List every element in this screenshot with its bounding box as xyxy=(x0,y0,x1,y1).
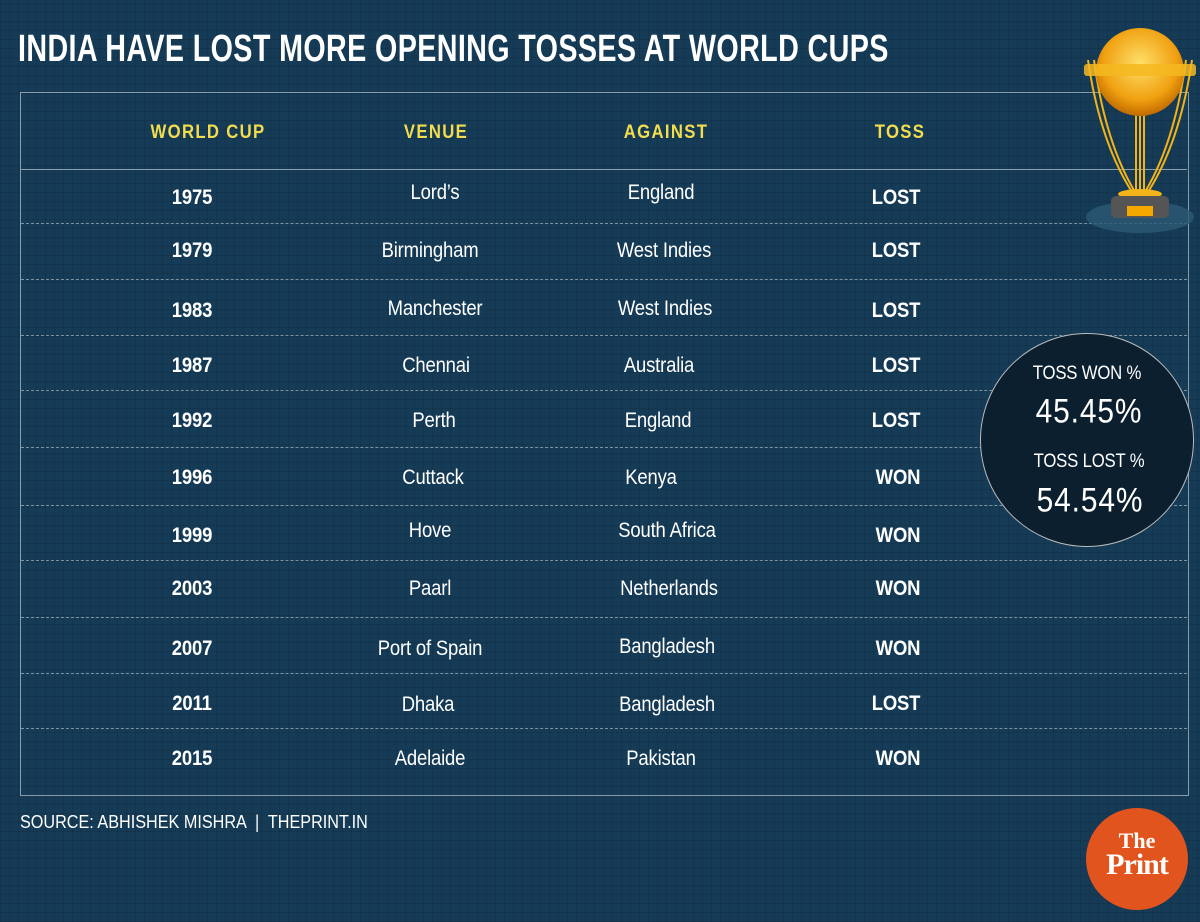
text: Adelaide xyxy=(395,747,465,770)
icon: trophy xyxy=(1084,28,1196,233)
text: 2003 xyxy=(172,577,212,600)
table header xyxy=(150,122,925,143)
text: Port of Spain xyxy=(378,637,482,660)
text: 1983 xyxy=(172,299,212,322)
text: 1992 xyxy=(172,409,212,432)
logo: ThePrint xyxy=(1086,808,1188,910)
text: VENUE xyxy=(404,122,468,143)
text: 1987 xyxy=(172,354,212,377)
text: Dhaka xyxy=(402,693,454,716)
text: LOST xyxy=(872,354,920,377)
text: AGAINST xyxy=(624,122,708,143)
stats circle: 45.45% xyxy=(1036,392,1142,430)
source: SOURCE: ABHISHEK MISHRA | THEPRINT.IN xyxy=(20,812,368,832)
text: WORLD CUP xyxy=(151,122,265,143)
stats circle xyxy=(980,333,1194,547)
text: England xyxy=(625,409,691,432)
text: Pakistan xyxy=(626,747,696,770)
text: Cuttack xyxy=(402,466,464,489)
text: 2015 xyxy=(172,747,212,770)
text: LOST xyxy=(872,299,920,322)
title: INDIA HAVE LOST MORE OPENING TOSSES AT WORLD CUPS xyxy=(18,28,889,70)
text: 2011 xyxy=(172,692,212,715)
text: WON xyxy=(876,577,920,600)
text: Birmingham xyxy=(382,239,478,262)
table panel xyxy=(20,92,1189,796)
text: WON xyxy=(876,747,920,770)
text: 2007 xyxy=(172,637,212,660)
text: WON xyxy=(876,466,920,489)
text: Kenya xyxy=(625,466,677,489)
text: 1975 xyxy=(172,186,212,209)
logo: ThePrint: The xyxy=(1119,828,1155,853)
text: West Indies xyxy=(618,297,712,320)
logo: ThePrint: Print xyxy=(1106,848,1168,881)
text: 1996 xyxy=(172,466,212,489)
text: LOST xyxy=(872,239,920,262)
text: Chennai xyxy=(402,354,470,377)
text: Paarl xyxy=(409,577,451,600)
text: Manchester xyxy=(388,297,482,320)
text: West Indies xyxy=(617,239,711,262)
text: LOST xyxy=(872,692,920,715)
text: England xyxy=(628,181,694,204)
text: Hove xyxy=(409,519,451,542)
stats circle: TOSS LOST % xyxy=(1034,451,1144,472)
text: Bangladesh xyxy=(619,635,715,658)
text: Netherlands xyxy=(620,577,718,600)
text: Perth xyxy=(412,409,456,432)
text: Bangladesh xyxy=(619,693,715,716)
text: TOSS xyxy=(875,122,925,143)
table rows xyxy=(172,181,920,770)
text: 1999 xyxy=(172,524,212,547)
text: WON xyxy=(876,637,920,660)
text: Australia xyxy=(624,354,694,377)
text: LOST xyxy=(872,409,920,432)
text: South Africa xyxy=(618,519,716,542)
text: 1979 xyxy=(172,239,212,262)
stats circle: 54.54% xyxy=(1037,482,1143,520)
text: Lord’s xyxy=(411,181,459,204)
stats circle: TOSS WON % xyxy=(1033,363,1141,384)
text: LOST xyxy=(872,186,920,209)
text: WON xyxy=(876,524,920,547)
